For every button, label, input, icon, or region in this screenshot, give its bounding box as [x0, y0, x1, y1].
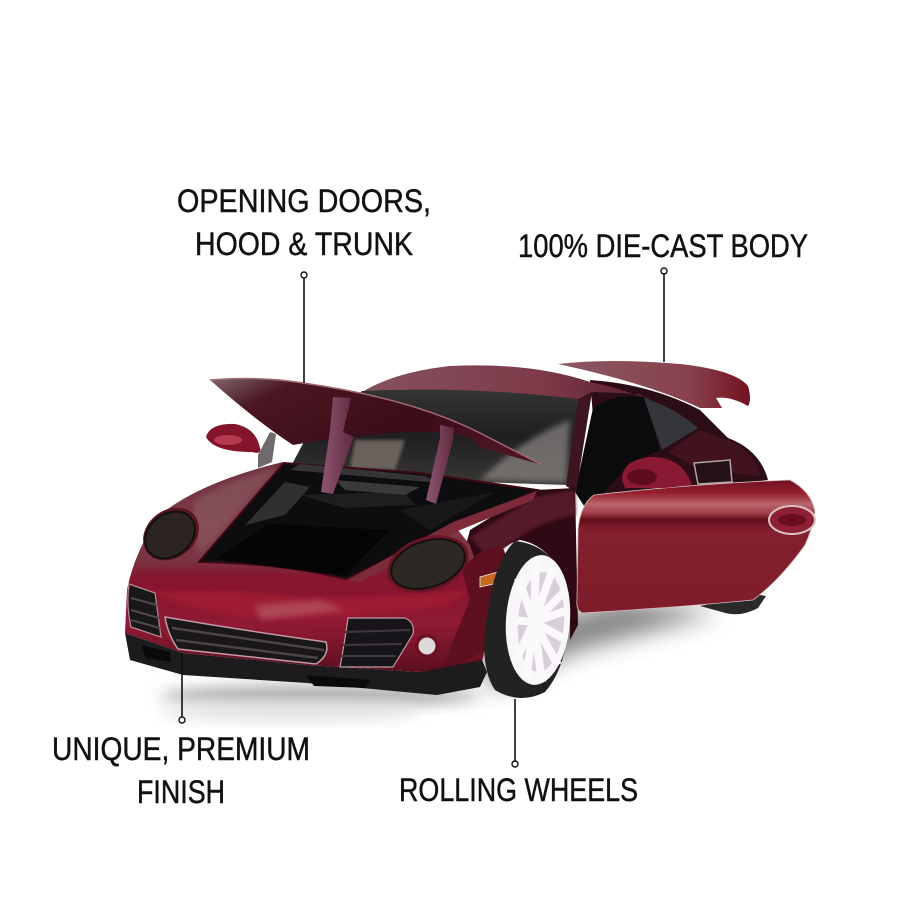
label: opening doors, hood & trunk: OPENING DOORS, [177, 183, 431, 219]
a-pillar [566, 392, 592, 492]
hood strut left [321, 397, 354, 494]
rear body quarter [590, 380, 768, 500]
rear side window [644, 398, 698, 450]
glass reflection under hood [350, 440, 405, 470]
label: 100% die-cast body [518, 228, 808, 362]
right door mirror [622, 457, 692, 488]
trunk opening [199, 463, 537, 579]
pale hood sheen [193, 468, 278, 555]
door opening interior [575, 396, 660, 512]
wheel spokes [512, 560, 568, 682]
lower bumper intake [306, 675, 370, 688]
left headlight [133, 497, 209, 571]
label: unique, premium finish [52, 653, 310, 810]
pale bumper glare [255, 600, 345, 620]
label: opening doors, hood & trunk [177, 183, 431, 383]
right hood gutter [347, 491, 537, 582]
label: unique, premium finish: FINISH [137, 774, 225, 810]
fender shine [470, 490, 576, 560]
right side vent [340, 618, 413, 667]
ground shadow [160, 600, 720, 722]
right headlight [380, 525, 476, 603]
fender red flank [440, 546, 505, 672]
rear badge vent [694, 460, 732, 484]
left door mirror [206, 424, 276, 468]
side fender [462, 488, 578, 640]
engine bay details [215, 464, 495, 576]
turn signal [480, 570, 505, 587]
roof [362, 365, 694, 424]
hood strut right [426, 425, 454, 504]
label: rolling wheels [399, 699, 638, 808]
open hood [210, 379, 542, 504]
rear wheel [700, 594, 766, 614]
left side vent [128, 584, 161, 637]
bright bumper highlight [150, 590, 470, 620]
label: unique, premium finish: UNIQUE, PREMIUM [52, 731, 310, 767]
lower bumper left intake [141, 645, 171, 662]
body nose [125, 462, 487, 672]
label: 100% die-cast body: 100% DIE-CAST BODY [518, 228, 808, 264]
spoiler [558, 361, 750, 408]
windshield [290, 390, 578, 485]
windshield reflection [480, 420, 570, 482]
fog lamp [415, 634, 439, 658]
rear quarter highlight [668, 430, 760, 476]
car illustration [125, 361, 815, 722]
door handle [769, 506, 815, 534]
front grille [165, 617, 327, 664]
label: rolling wheels: ROLLING WHEELS [399, 772, 638, 808]
label: opening doors, hood & trunk: HOOD & TRUNK [195, 226, 413, 262]
open door [577, 480, 815, 613]
black lower bumper [125, 633, 487, 695]
front wheel [484, 541, 574, 698]
